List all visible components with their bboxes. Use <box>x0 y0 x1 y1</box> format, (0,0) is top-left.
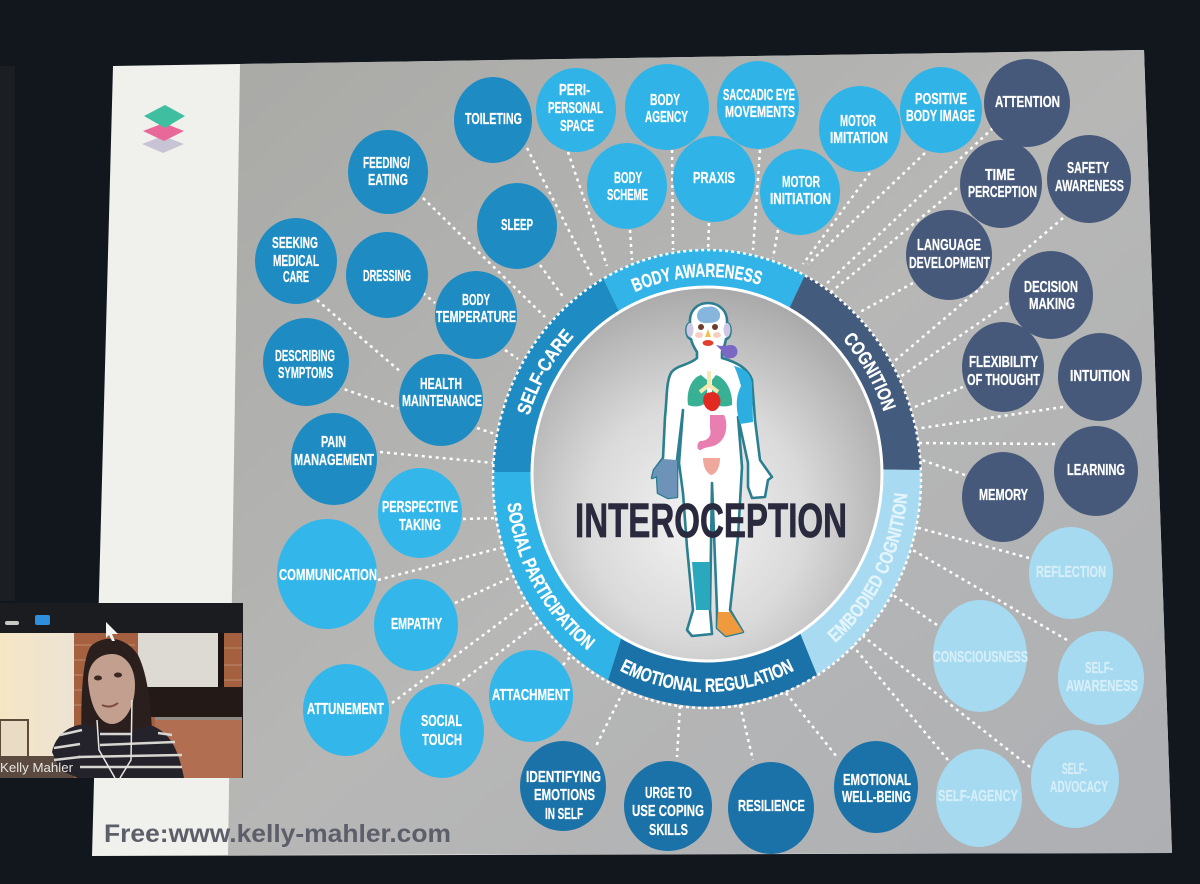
bubble: perspective taking: TAKING <box>399 517 441 534</box>
bubble: positive body image <box>900 67 982 153</box>
bubble: memory <box>962 452 1044 542</box>
bubble: body agency: BODY <box>650 92 680 109</box>
bubble: attunement <box>303 664 389 756</box>
footer website text: Free:www.kelly-mahler.com <box>104 820 451 848</box>
bubble: social touch <box>400 684 484 778</box>
bubble: peri-personal space: PERSONAL <box>548 100 603 117</box>
bubble: pain management: MANAGEMENT <box>294 452 374 469</box>
bubble: attachment <box>489 650 573 742</box>
bubble: consciousness <box>933 600 1028 712</box>
bubble: dressing <box>346 232 428 318</box>
bubble: motor imitation: MOTOR <box>840 113 876 130</box>
bubble: identifying emotions in self: IN SELF <box>545 806 583 823</box>
bubble: intuition: INTUITION <box>1070 368 1130 385</box>
bubble: reflection: REFLECTION <box>1036 564 1106 581</box>
bubble: positive body image: POSITIVE <box>915 91 967 108</box>
label: body awareness: BODY AWARENESS <box>630 264 762 292</box>
bubble: empathy: EMPATHY <box>391 616 442 633</box>
bubble: flexibility of thought <box>962 322 1044 412</box>
bubble: urge to use coping skills: USE COPING <box>632 803 704 820</box>
cheeks <box>695 332 721 338</box>
hand shaded <box>652 459 677 498</box>
body awareness bubbles <box>536 61 982 235</box>
social participation bubbles <box>277 468 573 778</box>
bubble: flexibility of thought: OF THOUGHT <box>967 372 1040 389</box>
bubble: identifying emotions in self <box>520 741 606 831</box>
bubble: seeking medical care: SEEKING <box>272 235 318 252</box>
dashed connector lines <box>317 128 1067 767</box>
bubble: health maintenance: HEALTH <box>420 376 462 393</box>
label: emotional regulation: EMOTIONAL REGULATION <box>620 658 794 692</box>
bubble: peri-personal space <box>536 68 616 152</box>
bubble: time perception: TIME <box>985 167 1015 184</box>
bubble: motor initiation: MOTOR <box>782 174 820 191</box>
bubble: social touch: TOUCH <box>422 732 462 749</box>
bubble: motor imitation: IMITATION <box>830 130 888 147</box>
bubble: feeding/eating: FEEDING/ <box>363 155 410 172</box>
bubble: learning: LEARNING <box>1067 462 1125 479</box>
body outline <box>652 303 772 636</box>
bubble: communication: COMMUNICATION <box>279 567 377 584</box>
bubble: health maintenance: MAINTENANCE <box>402 393 482 410</box>
bubble: memory: MEMORY <box>979 487 1028 504</box>
bubble: body temperature: TEMPERATURE <box>436 309 516 326</box>
bubble: saccadic eye movements <box>717 61 799 149</box>
ring segment: self-care <box>493 278 707 474</box>
ring segment: social participation <box>493 472 707 680</box>
bubble: attunement: ATTUNEMENT <box>307 701 384 718</box>
bubble: body agency <box>625 64 709 150</box>
bubble: safety awareness <box>1047 135 1131 223</box>
calf shaded <box>692 562 710 610</box>
bubble: language development <box>906 210 992 300</box>
bubble: language development: LANGUAGE <box>917 237 981 254</box>
bubble: seeking medical care: CARE <box>283 269 309 286</box>
mouse cursor <box>106 622 118 641</box>
bubble: urge to use coping skills: URGE TO <box>645 785 692 802</box>
bubble: language development: DEVELOPMENT <box>909 255 990 272</box>
bubble: attention <box>984 59 1070 147</box>
title: INTEROCEPTION <box>575 495 847 548</box>
bubble: urge to use coping skills: SKILLS <box>649 822 688 839</box>
ring segment: emotional regulation <box>608 474 817 707</box>
bubble: emotional well-being: EMOTIONAL <box>843 772 911 789</box>
bubble: peri-personal space: SPACE <box>560 118 594 135</box>
bubble: reflection <box>1029 527 1113 619</box>
bubble: positive body image: BODY IMAGE <box>906 108 975 125</box>
bubble: decision making <box>1009 251 1093 339</box>
bubble: perspective taking <box>378 468 462 558</box>
body figure <box>652 303 772 636</box>
heart <box>703 392 721 411</box>
video scene <box>0 633 242 778</box>
bubble: pain management <box>291 413 377 505</box>
label: social participation: SOCIAL PARTICIPATION <box>508 502 596 650</box>
bubble: safety awareness: AWARENESS <box>1055 178 1124 195</box>
bubble: social touch: SOCIAL <box>421 713 462 730</box>
bubble: attachment: ATTACHMENT <box>492 687 570 704</box>
bubble: body temperature: BODY <box>462 292 490 309</box>
bubble: time perception <box>960 140 1042 228</box>
bubble: body scheme <box>587 143 667 229</box>
arm muscle <box>734 366 753 424</box>
emotional regulation bubbles <box>520 741 918 854</box>
eyes <box>698 324 718 330</box>
bubble: self-advocacy: SELF- <box>1062 761 1087 778</box>
gray slide panel <box>228 50 1172 855</box>
self-care bubbles <box>255 77 557 505</box>
bubble: body temperature <box>435 271 517 359</box>
bubble: urge to use coping skills <box>624 761 712 851</box>
bubble: sleep <box>477 183 557 269</box>
bubble: emotional well-being: WELL-BEING <box>842 789 911 806</box>
bubble: intuition <box>1058 333 1142 421</box>
bubble: saccadic eye movements: MOVEMENTS <box>725 104 795 121</box>
nose <box>705 329 711 337</box>
bubble: describing symptoms: SYMPTOMS <box>278 365 333 382</box>
bubble: flexibility of thought: FLEXIBILITY <box>969 354 1038 371</box>
foot shaded <box>717 612 743 636</box>
bubble: body scheme: SCHEME <box>607 187 648 204</box>
logo: stacked layers icon <box>142 105 185 153</box>
embodied cognition bubbles <box>933 527 1144 847</box>
ring labels <box>508 264 908 692</box>
bubble: describing symptoms <box>263 318 349 406</box>
bubble: pain management: PAIN <box>321 434 346 451</box>
bubble: decision making: MAKING <box>1029 296 1075 313</box>
bubble: feeding/eating: EATING <box>368 172 408 189</box>
brain <box>697 307 720 323</box>
bubble: learning <box>1054 426 1138 516</box>
bubble: empathy <box>374 579 458 671</box>
stomach <box>697 415 726 450</box>
bubble: identifying emotions in self: EMOTIONS <box>534 787 595 804</box>
ears <box>686 323 730 337</box>
bubble: resilience: RESILIENCE <box>738 798 805 815</box>
bubble: seeking medical care <box>255 218 337 304</box>
bubble: emotional well-being <box>834 741 918 833</box>
bubble: praxis <box>673 136 755 222</box>
bubble: motor initiation: INITIATION <box>770 191 831 208</box>
bubble: perspective taking: PERSPECTIVE <box>382 499 458 516</box>
bubble: decision making: DECISION <box>1024 279 1078 296</box>
label: embodied cognition: EMBODIED COGNITION <box>827 493 908 642</box>
bubble: time perception: PERCEPTION <box>968 184 1037 201</box>
bubble: motor imitation <box>819 86 901 172</box>
bubble: praxis: PRAXIS <box>693 170 735 187</box>
bubble: toileting: TOILETING <box>465 111 522 128</box>
bubble: self-advocacy: ADVOCACY <box>1050 779 1108 796</box>
bubble: health maintenance <box>399 354 483 446</box>
bubble: motor initiation <box>760 149 840 235</box>
bubble: self-awareness: AWARENESS <box>1066 678 1138 695</box>
webcam toolbar buttons <box>5 615 50 625</box>
bubble: self-advocacy <box>1031 730 1119 828</box>
lungs <box>688 375 707 406</box>
cognition bubbles <box>906 59 1142 542</box>
bubble: communication <box>277 519 377 629</box>
airway <box>700 371 718 392</box>
bubble: identifying emotions in self: IDENTIFYING <box>526 769 601 786</box>
label: self-care: SELF-CARE <box>518 328 574 414</box>
bubble: attention: ATTENTION <box>995 94 1060 111</box>
bubble: peri-personal space: PERI- <box>559 82 590 99</box>
bubble: saccadic eye movements: SACCADIC EYE <box>723 87 795 104</box>
bubble: sleep: SLEEP <box>501 217 533 234</box>
participant name: Kelly Mahler <box>0 760 74 775</box>
bubble: consciousness: CONSCIOUSNESS <box>933 649 1028 666</box>
mouth <box>702 340 714 346</box>
ring segment: body awareness <box>603 249 805 474</box>
bubble: toileting <box>454 77 532 163</box>
central disc <box>532 287 882 661</box>
bubble: feeding/eating <box>348 130 428 214</box>
bubble: dressing: DRESSING <box>363 268 411 285</box>
ring segment: embodied cognition <box>707 469 921 675</box>
bubble: self-agency <box>936 749 1022 847</box>
speech bubble <box>716 345 738 358</box>
bubble: safety awareness: SAFETY <box>1067 160 1109 177</box>
bubble: self-awareness <box>1058 631 1144 725</box>
bubble: resilience <box>728 762 814 854</box>
bladder <box>703 458 720 475</box>
webcam window <box>0 603 243 778</box>
bubble: self-agency: SELF-AGENCY <box>938 788 1018 805</box>
bubble: body agency: AGENCY <box>645 109 688 126</box>
bubble: seeking medical care: MEDICAL <box>273 253 319 270</box>
bubble: body scheme: BODY <box>614 170 642 187</box>
central ring <box>493 249 921 708</box>
label: cognition: COGNITION <box>844 333 896 412</box>
ring segment: cognition <box>707 275 921 474</box>
bubble: self-awareness: SELF- <box>1085 660 1113 677</box>
person <box>52 639 184 778</box>
bubble: describing symptoms: DESCRIBING <box>275 348 335 365</box>
